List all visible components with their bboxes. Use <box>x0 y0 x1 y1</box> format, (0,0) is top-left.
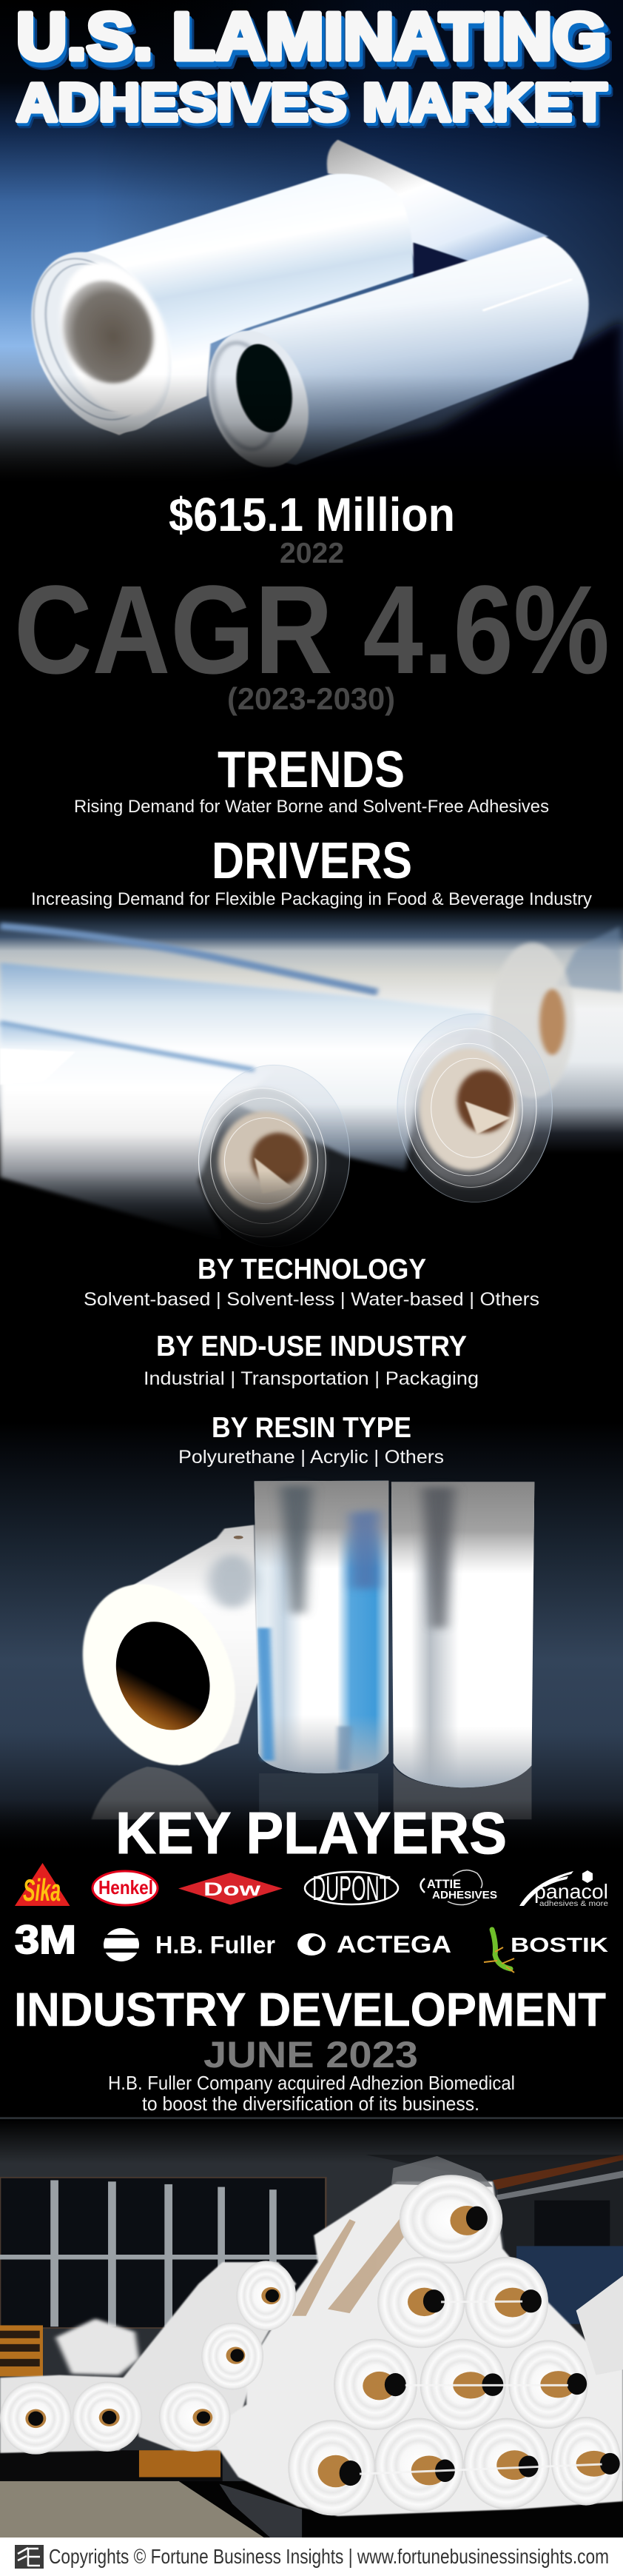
windows <box>0 2178 326 2328</box>
end-use segments: Industrial | Transportation | Packaging <box>144 1368 479 1389</box>
logo: Henkel: Henkel <box>98 1876 153 1898</box>
left roll body <box>119 1525 258 1765</box>
market size value: $615.1 Million <box>169 488 455 541</box>
development text <box>108 2072 515 2115</box>
logo: Panacol: adhesives & more <box>539 1900 609 1908</box>
warehouse photo <box>0 2117 623 2539</box>
by resin type heading: BY RESIN TYPE <box>212 1412 411 1444</box>
industry development heading: INDUSTRY DEVELOPMENT <box>14 1983 606 2036</box>
logo: Sika <box>15 1863 70 1907</box>
floor <box>0 2481 266 2539</box>
footer <box>0 2537 623 2576</box>
far roll <box>491 943 574 1098</box>
resin segments: Polyurethane | Acrylic | Others <box>178 1447 444 1468</box>
left roll <box>9 174 413 444</box>
upright roll right <box>391 1482 534 1787</box>
icon: Fortune Business Insights logo <box>15 2545 44 2569</box>
logo: H.B. Fuller <box>104 1928 275 1961</box>
right building wall <box>366 2155 623 2343</box>
middle roll end <box>397 1014 552 1202</box>
roll core holes <box>28 2207 620 2486</box>
title <box>16 0 613 138</box>
key players heading: KEY PLAYERS <box>115 1800 507 1866</box>
logo: Panacol: panacol <box>534 1880 608 1903</box>
image: rolls with upright sheets <box>0 1422 623 1854</box>
title line 2: ADHESIVES MARKET <box>16 73 607 133</box>
top fade of warehouse photo <box>0 2119 623 2164</box>
gap between rolls <box>413 242 473 278</box>
logo: Bostik <box>484 1930 608 1973</box>
left roll end <box>63 1577 255 1772</box>
logo: 3M: 3M <box>15 1918 76 1962</box>
logo: Dow: Dow <box>203 1879 261 1900</box>
logo: Henkel <box>92 1871 158 1905</box>
title line 2 depth: ADHESIVES MARKET <box>18 76 610 136</box>
stretch wrap straps <box>360 2301 602 2474</box>
middle roll body <box>0 963 489 1171</box>
hero image: film rolls on blue background <box>0 0 623 482</box>
logo: Sika: Sika <box>23 1873 61 1907</box>
trends text: Rising Demand for Water Borne and Solvent-Free Adhesives <box>74 797 549 817</box>
development date: JUNE 2023 <box>203 2034 418 2075</box>
base year: 2022 <box>280 538 344 569</box>
forecast period: (2023-2030) <box>227 681 395 716</box>
pallets <box>0 2325 302 2537</box>
trends heading: TRENDS <box>218 740 405 798</box>
logo: Actega <box>297 1931 451 1958</box>
development text: to boost the diversification of its business. <box>142 2092 479 2115</box>
development text: H.B. Fuller Company acquired Adhezion Biomedical <box>108 2072 515 2094</box>
film rolls <box>0 2175 621 2515</box>
front roll <box>195 236 589 473</box>
logo: Actega: ACTEGA <box>337 1931 451 1958</box>
tan labels <box>292 2188 421 2316</box>
technology segments: Solvent-based | Solvent-less | Water-based | Others <box>84 1289 539 1310</box>
logo: Panacol <box>519 1870 609 1908</box>
floor reflections <box>92 1765 532 1820</box>
title line 1 depth: U.S. LAMINATING <box>20 7 613 81</box>
background bags <box>55 2318 139 2375</box>
drivers text: Increasing Demand for Flexible Packaging in Food & Beverage Industry <box>31 889 592 909</box>
title line 2 depth: ADHESIVES MARKET <box>19 78 611 138</box>
image: transparent film rolls <box>0 906 623 1250</box>
by technology heading: BY TECHNOLOGY <box>198 1254 426 1285</box>
front roll body <box>0 1023 275 1240</box>
upright roll middle <box>255 1481 388 1773</box>
logo: Cattie Adhesives: ATTIE <box>427 1877 461 1891</box>
main stack wrap <box>206 2181 623 2516</box>
logo: Dow <box>178 1873 283 1904</box>
title line 1 depth: U.S. LAMINATING <box>18 5 611 79</box>
front roll end <box>198 1065 350 1247</box>
back film sheet <box>327 140 548 275</box>
logo: Cattie Adhesives <box>420 1870 497 1905</box>
by end-use heading: BY END-USE INDUSTRY <box>156 1331 467 1362</box>
logo: H.B. Fuller: H.B. Fuller <box>155 1931 275 1958</box>
title line 1: U.S. LAMINATING <box>16 0 607 74</box>
logo: Bostik: BOSTIK <box>511 1933 608 1956</box>
logo: DuPont <box>305 1869 398 1907</box>
logo: DuPont: DUPONT <box>312 1869 391 1907</box>
lower fade of rolls image <box>0 1799 623 1855</box>
left stack wrap <box>123 2262 296 2450</box>
logo: Cattie Adhesives: ADHESIVES <box>432 1889 497 1901</box>
drivers heading: DRIVERS <box>212 832 412 889</box>
cardboard roll cores <box>25 2206 612 2487</box>
